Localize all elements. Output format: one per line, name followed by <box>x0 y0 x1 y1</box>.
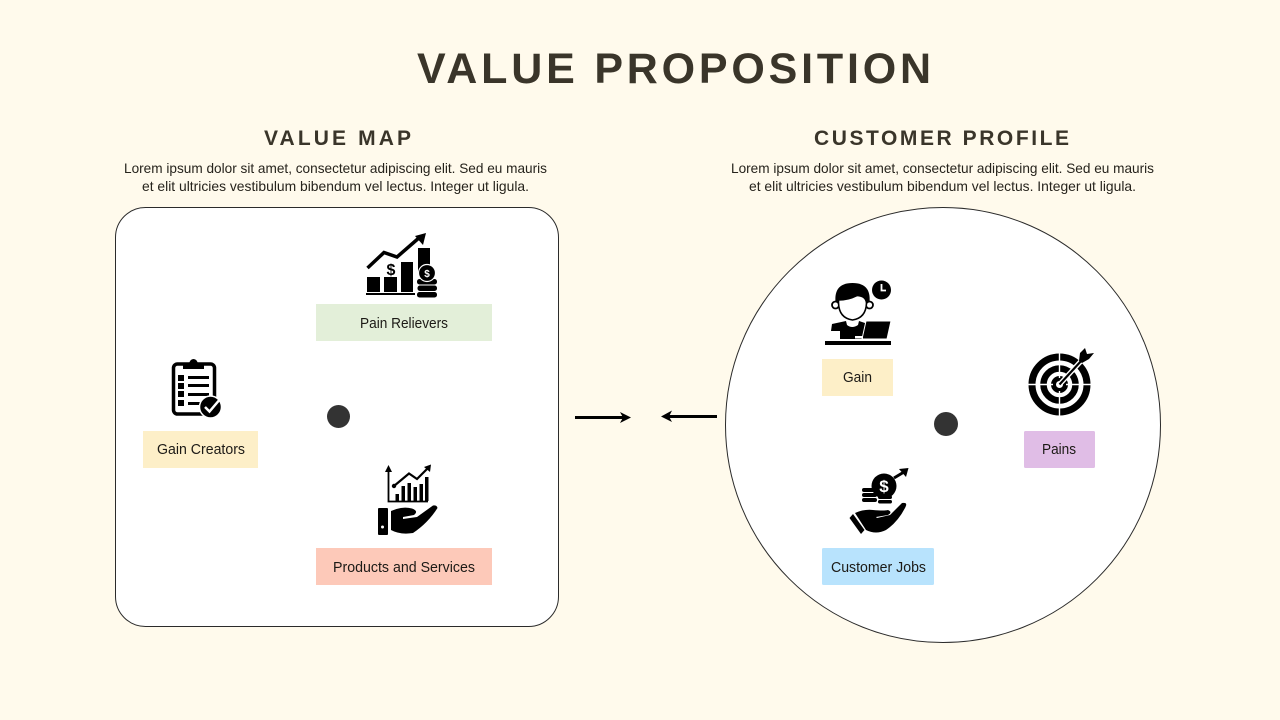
icon: clipboard checklist <box>174 359 222 418</box>
text block: customer profile description: et elit ultricies vestibulum bibendum vel lectus. Integer ut ligula. <box>749 178 1136 194</box>
center dot: customer profile <box>934 412 958 436</box>
icon: hand with coins and arrow: $ <box>879 477 889 496</box>
panel: customer profile <box>726 208 1160 642</box>
icon: hand with coins and arrow <box>850 468 908 534</box>
icon: growth chart with coins: $ <box>424 269 430 280</box>
label: products and services <box>316 548 492 585</box>
icon: target with arrow <box>1027 348 1094 417</box>
panel: value map <box>116 208 558 626</box>
label: pain relievers: Pain Relievers <box>360 316 448 332</box>
label: gain creators: Gain Creators <box>157 442 245 458</box>
label: gain: Gain <box>843 370 872 386</box>
text block: value map description: Lorem ipsum dolor sit amet, consectetur adipiscing elit. Sed eu mauris <box>124 160 547 176</box>
label: customer jobs: Customer Jobs <box>831 560 926 576</box>
label: pains <box>1024 431 1095 468</box>
label: gain <box>822 359 893 396</box>
arrow: left <box>661 410 717 422</box>
icon: growth chart with coins: $ <box>387 262 396 279</box>
arrow: right <box>575 412 631 423</box>
label: pain relievers <box>316 304 492 341</box>
label: customer jobs <box>822 548 934 585</box>
text block: customer profile description <box>731 160 1154 194</box>
heading: value map: VALUE MAP <box>264 127 411 150</box>
label: products and services: Products and Services <box>333 560 475 576</box>
text block: customer profile description: Lorem ipsum dolor sit amet, consectetur adipiscing elit. Sed eu mauris <box>731 160 1154 176</box>
label: pains: Pains <box>1042 442 1076 458</box>
icon: person at laptop with clock <box>825 280 891 345</box>
heading: customer profile: CUSTOMER PROFILE <box>814 127 1069 150</box>
label: gain creators <box>143 431 258 468</box>
center dot: value map <box>327 405 350 428</box>
icon: hand holding chart <box>378 464 438 535</box>
text block: value map description: et elit ultricies vestibulum bibendum vel lectus. Integer ut ligula. <box>142 178 529 194</box>
icon: growth chart with coins <box>366 233 437 298</box>
title: VALUE PROPOSITION <box>417 45 931 93</box>
text block: value map description <box>124 160 547 194</box>
